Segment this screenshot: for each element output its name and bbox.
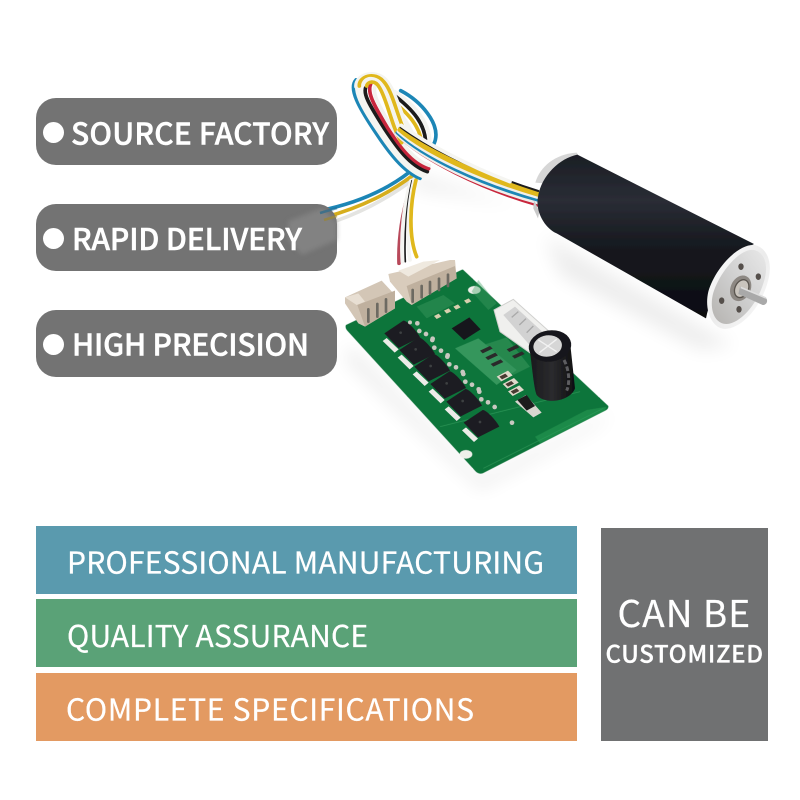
front loop strands bbox=[353, 79, 429, 178]
rear loop strands bbox=[380, 88, 436, 154]
bullet bbox=[43, 334, 64, 355]
pill: high precision bbox=[36, 310, 337, 377]
MOSFET 1 bbox=[383, 320, 435, 353]
three pin connector bbox=[345, 281, 395, 327]
MOSFET 4 bbox=[429, 371, 481, 403]
band: professional manufacturing: PROFESSIONAL MANUFACTURING bbox=[67, 539, 544, 583]
motor rear ring bbox=[535, 153, 580, 183]
bearing bbox=[726, 272, 755, 305]
MOSFET 3 bbox=[413, 354, 465, 386]
pill: rapid delivery bbox=[36, 204, 337, 271]
MOSFET 6 bbox=[462, 410, 514, 442]
label: RAPID DELIVERY bbox=[72, 215, 302, 259]
motor bbox=[533, 153, 770, 329]
diode bbox=[515, 395, 542, 417]
bullet bbox=[43, 122, 64, 143]
band: quality assurance: QUALITY ASSURANCE bbox=[67, 612, 368, 656]
traces area bbox=[417, 280, 530, 385]
MOSFET 2 bbox=[398, 337, 450, 369]
panel: can be customized bbox=[601, 528, 768, 741]
wiring harness bbox=[320, 74, 538, 263]
bullet bbox=[43, 228, 64, 249]
board substrate bbox=[345, 269, 608, 474]
MOSFET row bbox=[383, 320, 514, 442]
shaft bbox=[738, 287, 767, 305]
driver board bbox=[345, 260, 608, 474]
panel: can be customized: CUSTOMIZED bbox=[606, 635, 763, 670]
IC chip bbox=[452, 317, 481, 340]
connector seen through pill bbox=[288, 208, 337, 255]
pill: source factory bbox=[36, 98, 337, 165]
band: complete specifications bbox=[36, 673, 577, 741]
bundle to motor bbox=[397, 125, 538, 205]
MOSFET 5 bbox=[445, 389, 497, 421]
leads to pill connector bbox=[320, 172, 417, 221]
product shadows bbox=[345, 170, 735, 490]
small components bbox=[434, 298, 471, 319]
motor body bbox=[537, 155, 754, 318]
band: professional manufacturing bbox=[36, 526, 577, 594]
five pin connector bbox=[388, 260, 457, 305]
electrolytic capacitor bbox=[527, 328, 575, 401]
label: HIGH PRECISION bbox=[72, 321, 309, 365]
leads to board connector bbox=[399, 180, 417, 263]
crown of loop bbox=[356, 74, 412, 143]
mounting holes bbox=[738, 263, 744, 270]
white connector bbox=[494, 299, 548, 354]
band: quality assurance bbox=[36, 599, 577, 667]
motor front face bbox=[707, 245, 770, 329]
label: SOURCE FACTORY bbox=[71, 109, 329, 153]
power resistors bbox=[497, 371, 524, 396]
band: complete specifications: COMPLETE SPECIFICATIONS bbox=[66, 686, 474, 730]
mounting holes bbox=[468, 286, 481, 294]
panel: can be customized: CAN BE bbox=[618, 584, 750, 638]
